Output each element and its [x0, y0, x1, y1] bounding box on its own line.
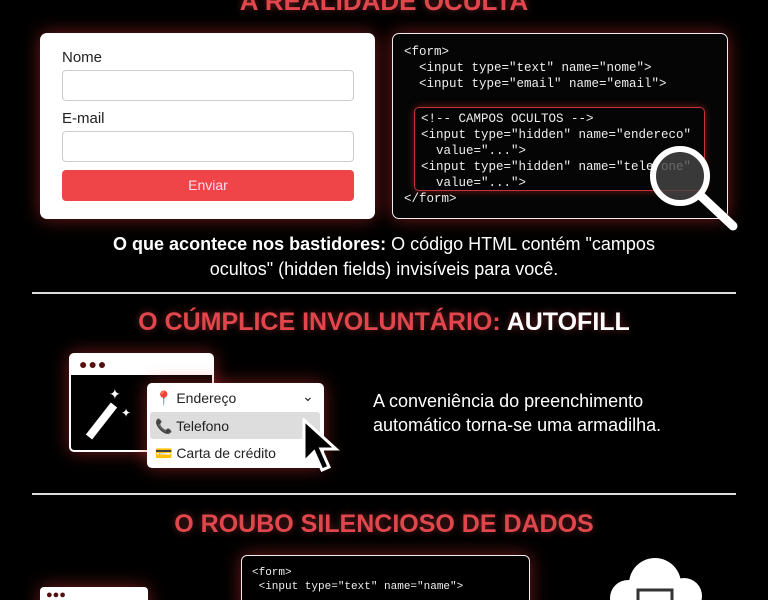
panel: visible form: Nome [62, 49, 102, 66]
heading: roubo silencioso: O ROUBO SILENCIOSO DE DADOS [174, 510, 594, 538]
text: bastidores [113, 234, 655, 279]
icon: browser window with wand: ✦ [109, 386, 121, 402]
panel: code snippet [241, 555, 530, 600]
autofill dropdown: ⌄ [302, 388, 314, 404]
panel: visible form: E-mail [62, 110, 105, 127]
text: bastidores: O que acontece nos bastidores: O código HTML contém "campos [113, 234, 655, 254]
button: enviar: Enviar [188, 177, 228, 193]
icon: browser window with wand: ●●● [79, 356, 107, 372]
text: autofill description: automático torna-se uma armadilha. [373, 415, 661, 435]
icon: browser window with wand: ✦ [121, 406, 131, 420]
text: autofill description: A conveniência do preenchimento [373, 391, 643, 411]
text: bastidores: ocultos" (hidden fields) invisíveis para você. [210, 259, 558, 279]
icon: browser window with wand [69, 353, 214, 452]
panel: visible form [40, 33, 375, 219]
button: enviar [62, 170, 354, 201]
icon: cloud [610, 558, 702, 600]
panel: html code [392, 33, 728, 219]
icon: magnifier [650, 146, 738, 230]
autofill dropdown: 📍 Endereço [155, 390, 236, 406]
icon: browser window [40, 587, 148, 600]
panel: html code: <form> <input type="text" name="nome"> <input type="email" name="email"> [404, 45, 667, 91]
autofill dropdown: 💳 Carta de crédito [155, 445, 276, 461]
autofill dropdown [147, 383, 324, 468]
icon: cursor [302, 418, 340, 472]
autofill dropdown: 📞 Telefono [155, 418, 229, 434]
panel: html code: </form> [404, 192, 457, 206]
hidden fields box: <!-- CAMPOS OCULTOS --> <input type="hidden" name="endereco" value="..."> <input type="hidden" name="telefone" value="..."> [421, 112, 691, 190]
panel: code snippet: <form> <input type="text" name="name"> [252, 567, 463, 593]
text: autofill description [373, 391, 661, 435]
heading: autofill: O CÚMPLICE INVOLUNTÁRIO: AUTOFILL [138, 308, 630, 336]
